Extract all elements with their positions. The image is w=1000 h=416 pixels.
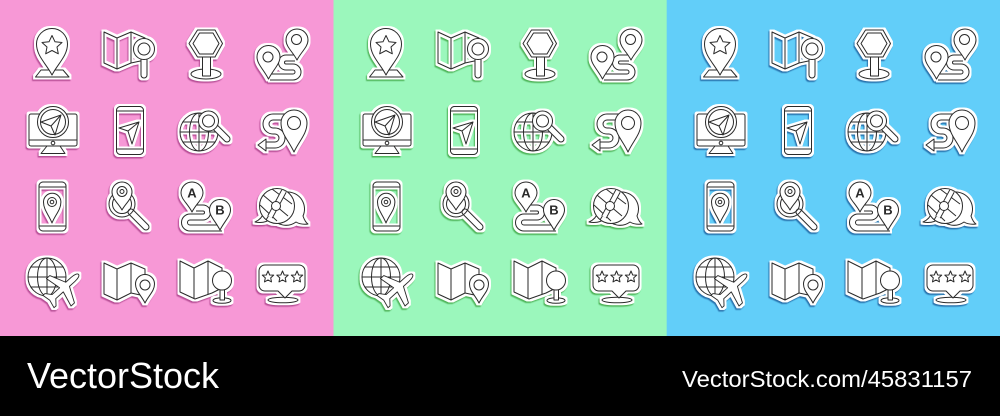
icon: map with push pin bbox=[514, 261, 566, 303]
icon: city map in speech bubble bbox=[255, 188, 308, 225]
icon: monitor with navigation arrow bbox=[29, 106, 77, 154]
icon: magnifier with pin bbox=[109, 182, 146, 227]
icon: hexagonal road sign bbox=[857, 30, 890, 79]
icon: phone with navigation arrow bbox=[116, 106, 144, 155]
icon: route from A to B: A bbox=[521, 186, 531, 200]
icon: monitor with navigation arrow bbox=[697, 106, 745, 154]
panel: green icon set bbox=[334, 0, 668, 336]
icon: map with pin bbox=[772, 263, 822, 303]
icon: route from A to B: A bbox=[187, 186, 197, 200]
icon: route from A to B: B bbox=[549, 202, 559, 218]
icon: phone with location pin bbox=[707, 182, 734, 231]
icon: map with pin bbox=[104, 263, 154, 303]
icon: map with push pin bbox=[848, 261, 900, 303]
icon: globe with magnifier bbox=[848, 111, 895, 151]
icon: globe with magnifier bbox=[180, 111, 227, 151]
icon: folded map with magnifier bbox=[772, 32, 822, 78]
icon: route from A to B bbox=[181, 182, 230, 230]
icon: folded map with magnifier bbox=[438, 32, 488, 78]
icon: route arrow and pin bbox=[926, 110, 975, 152]
icon: phone with location pin bbox=[39, 182, 66, 231]
brand name: VectorStock bbox=[27, 355, 220, 396]
icon: hexagonal road sign bbox=[523, 30, 556, 79]
icon: phone with navigation arrow bbox=[450, 106, 478, 155]
icon: map with push pin bbox=[180, 261, 232, 303]
icon: phone with navigation arrow bbox=[784, 106, 812, 155]
icon: globe with airplane bbox=[28, 258, 91, 315]
icon: three star rating bubble bbox=[259, 265, 305, 303]
icon: route arrow and pin bbox=[592, 110, 641, 152]
icon: city map in speech bubble bbox=[923, 188, 976, 225]
icon: magnifier with pin bbox=[777, 182, 814, 227]
icon: three star rating bubble bbox=[927, 265, 973, 303]
icon: location pin with star bbox=[704, 29, 737, 77]
icon: hexagonal road sign bbox=[189, 30, 222, 79]
icon: route from A to B: B bbox=[883, 202, 893, 218]
icon: route from A to B bbox=[849, 182, 898, 230]
icon: route from A to B bbox=[515, 182, 564, 230]
icon: globe with magnifier bbox=[514, 111, 561, 151]
icon: route arrow and pin bbox=[258, 110, 307, 152]
icon: map with pin bbox=[438, 263, 488, 303]
icon: globe with airplane bbox=[696, 258, 759, 315]
icon: route between two pins bbox=[257, 29, 308, 79]
icon: location pin with star bbox=[36, 29, 69, 77]
icon: three star rating bubble bbox=[593, 265, 639, 303]
footer bar bbox=[0, 336, 1000, 416]
icon: route between two pins bbox=[591, 29, 642, 79]
icon: phone with location pin bbox=[373, 182, 400, 231]
image id: VectorStock.com/45831157 bbox=[682, 366, 972, 392]
icon: folded map with magnifier bbox=[104, 32, 154, 78]
icon: city map in speech bubble bbox=[589, 188, 642, 225]
panel: pink icon set bbox=[0, 0, 334, 336]
icon: globe with airplane bbox=[362, 258, 425, 315]
icon: route from A to B: A bbox=[855, 186, 865, 200]
icon: location pin with star bbox=[370, 29, 403, 77]
icon: monitor with navigation arrow bbox=[363, 106, 411, 154]
panel: blue icon set bbox=[667, 0, 1000, 336]
icon: route between two pins bbox=[925, 29, 976, 79]
icon: route from A to B: B bbox=[215, 202, 225, 218]
icon: magnifier with pin bbox=[443, 182, 480, 227]
